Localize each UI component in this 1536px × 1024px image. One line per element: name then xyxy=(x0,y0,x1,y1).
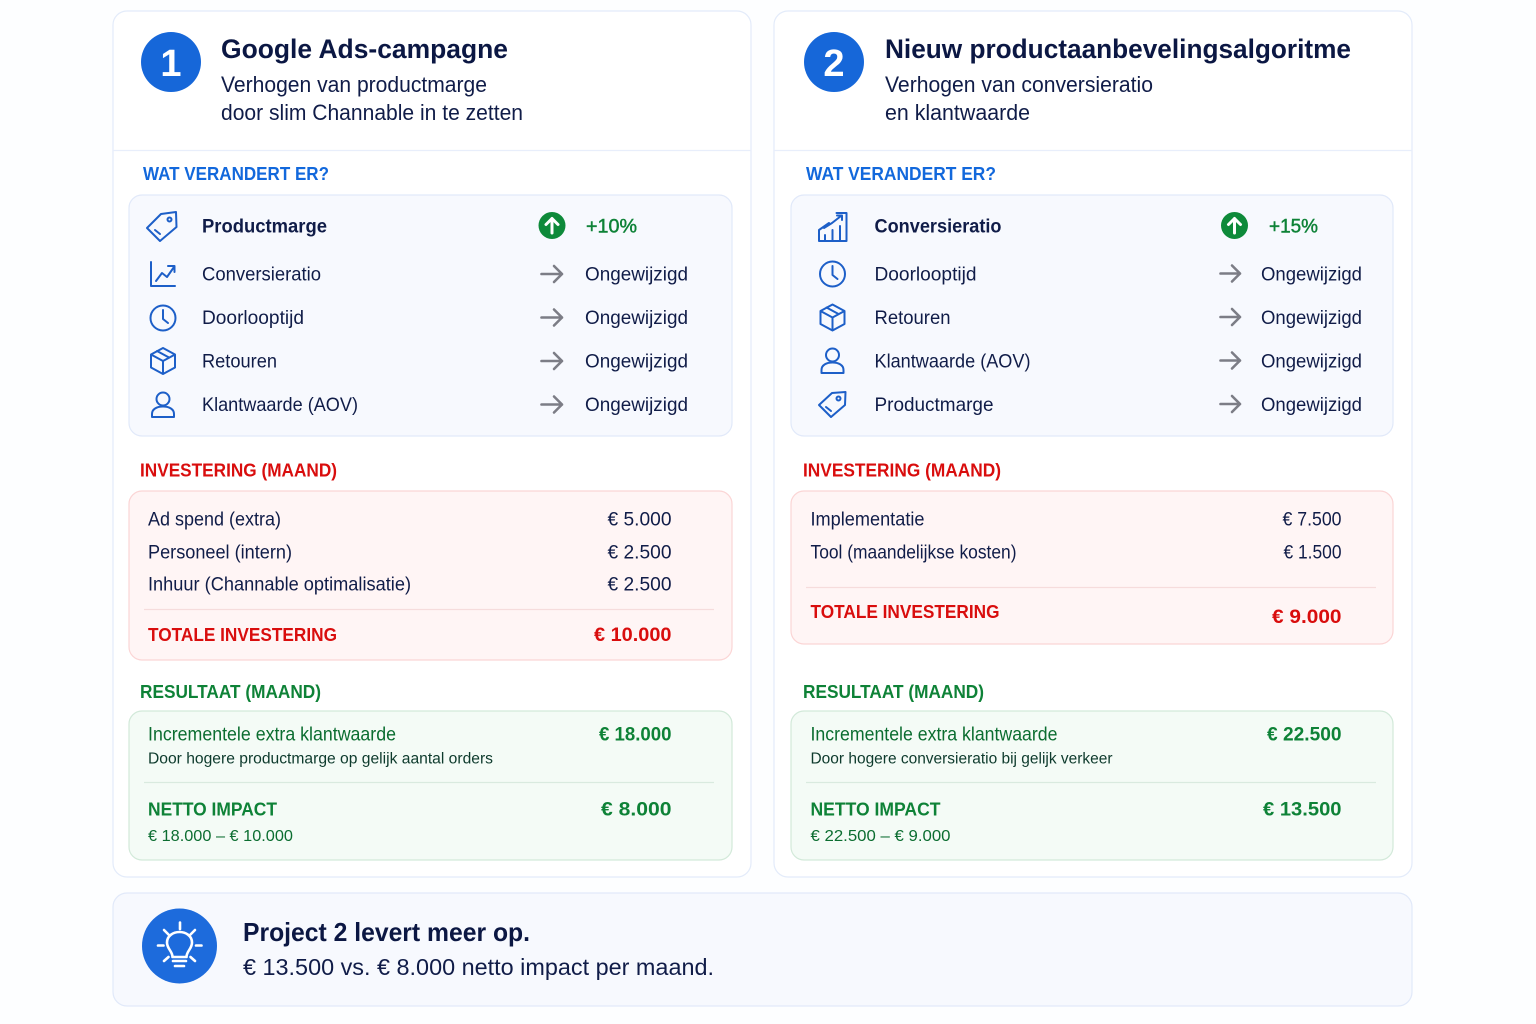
heading: Google Ads-campagne: Google Ads-campagne xyxy=(221,34,508,64)
panel: result table: NETTO IMPACT xyxy=(148,798,278,820)
heading: wat verandert er: WAT VERANDERT ER? xyxy=(806,163,996,184)
panel: result table: € 22.500 xyxy=(1267,724,1342,746)
row: Retouren: Ongewijzigd xyxy=(585,350,688,372)
subtitle: project 2: Verhogen van conversieratio xyxy=(885,72,1153,97)
panel: investment table xyxy=(791,491,1393,644)
panel: result table: € 18.000 xyxy=(599,724,672,746)
heading: wat verandert er: WAT VERANDERT ER? xyxy=(143,163,329,184)
panel: investment table: € 1.500 xyxy=(1284,542,1342,564)
heading: investering: INVESTERING (MAAND) xyxy=(803,460,1001,480)
badge: number 2: 2 xyxy=(823,43,845,85)
badge: number 1: 1 xyxy=(160,43,182,85)
subtitle: project 2: en klantwaarde xyxy=(885,100,1030,125)
row: Retouren xyxy=(820,304,1362,330)
badge: number 1 xyxy=(141,32,201,92)
row: Productmarge xyxy=(819,392,1362,417)
row: Retouren xyxy=(151,348,688,374)
heading: resultaat: RESULTAAT (MAAND) xyxy=(140,681,321,702)
panel: result table: € 13.500 xyxy=(1263,798,1342,820)
row: Doorlooptijd xyxy=(150,306,688,330)
row: Productmarge: Productmarge xyxy=(874,394,994,416)
panel: investment table: € 7.500 xyxy=(1282,508,1342,530)
panel: investment table: TOTALE INVESTERING xyxy=(810,601,1000,622)
text: conclusion detail: € 13.500 vs. € 8.000 netto impact per maand. xyxy=(243,954,714,980)
panel: result table: € 18.000 – € 10.000 xyxy=(148,828,293,845)
panel: result table xyxy=(129,711,732,860)
badge: number 2 xyxy=(804,32,864,92)
heading: resultaat: RESULTAAT (MAAND) xyxy=(803,681,984,702)
row: Conversieratio xyxy=(819,212,1318,241)
row: Retouren: Retouren xyxy=(202,350,277,372)
row: Productmarge: Ongewijzigd xyxy=(1261,394,1362,416)
row: Doorlooptijd: Doorlooptijd xyxy=(202,307,304,329)
icon: light bulb xyxy=(142,908,217,984)
row: Conversieratio: Conversieratio xyxy=(202,264,321,286)
heading: Nieuw productaanbevelingsalgoritme: Nieuw productaanbevelingsalgoritme xyxy=(885,34,1351,64)
row: Klantwaarde: Ongewijzigd xyxy=(585,394,688,416)
row: Doorlooptijd: Doorlooptijd xyxy=(874,264,976,286)
row: Klantwaarde xyxy=(822,348,1362,373)
panel: result table: € 8.000 xyxy=(601,798,672,820)
panel: result table: Incrementele extra klantwaarde xyxy=(810,724,1058,746)
panel: result table xyxy=(791,711,1393,860)
row: Retouren: Retouren xyxy=(874,307,950,329)
panel: investment table: € 10.000 xyxy=(594,624,672,646)
row: Conversieratio xyxy=(151,262,688,286)
row: Klantwaarde: Klantwaarde (AOV) xyxy=(874,350,1030,372)
panel: investment table: € 9.000 xyxy=(1272,606,1342,628)
row: Klantwaarde xyxy=(152,392,688,417)
panel: investment table: € 5.000 xyxy=(608,508,672,530)
panel: investment table: € 2.500 xyxy=(608,574,672,596)
panel: project 1 xyxy=(113,11,751,877)
panel: result table: Door hogere productmarge op gelijk aantal orders xyxy=(148,750,493,768)
panel: investment table: Implementatie xyxy=(810,508,924,530)
row: Conversieratio: Conversieratio xyxy=(874,216,1002,238)
subtitle: project 1: Verhogen van productmarge xyxy=(221,72,487,97)
row: Productmarge: +10% xyxy=(586,216,637,238)
row: Retouren: Ongewijzigd xyxy=(1261,307,1362,329)
row: Doorlooptijd xyxy=(820,262,1362,286)
subtitle: project 1: door slim Channable in te zetten xyxy=(221,100,523,125)
heading: investering: INVESTERING (MAAND) xyxy=(140,460,337,480)
row: Klantwaarde: Klantwaarde (AOV) xyxy=(202,394,358,416)
panel: changes table xyxy=(791,195,1393,436)
panel: investment table xyxy=(129,491,732,660)
panel: project 2 xyxy=(774,11,1412,877)
panel: investment table: € 2.500 xyxy=(608,542,672,564)
subtitle: project 2 xyxy=(885,72,1153,125)
panel: result table: NETTO IMPACT xyxy=(810,798,941,820)
row: Productmarge: Productmarge xyxy=(202,216,327,238)
row: Klantwaarde: Ongewijzigd xyxy=(1261,350,1362,372)
panel: investment table: Tool (maandelijkse kosten) xyxy=(810,542,1016,564)
panel: result table: Door hogere conversieratio bij gelijk verkeer xyxy=(810,750,1112,768)
panel: investment table: Ad spend (extra) xyxy=(148,508,281,530)
panel: investment table: TOTALE INVESTERING xyxy=(148,624,337,645)
row: Conversieratio: Ongewijzigd xyxy=(585,264,688,286)
row: Conversieratio: +15% xyxy=(1269,216,1318,238)
panel: result table: € 22.500 – € 9.000 xyxy=(810,828,951,845)
heading: conclusion: Project 2 levert meer op. xyxy=(243,917,530,947)
row: Productmarge xyxy=(147,212,637,241)
subtitle: project 1 xyxy=(221,72,523,125)
panel: investment table: Inhuur (Channable optimalisatie) xyxy=(148,574,411,596)
row: Doorlooptijd: Ongewijzigd xyxy=(1261,264,1362,286)
panel: result table: Incrementele extra klantwaarde xyxy=(148,724,396,746)
row: Doorlooptijd: Ongewijzigd xyxy=(585,307,688,329)
panel: conclusion xyxy=(113,893,1412,1006)
panel: investment table: Personeel (intern) xyxy=(148,542,292,564)
panel: changes table xyxy=(129,195,732,436)
